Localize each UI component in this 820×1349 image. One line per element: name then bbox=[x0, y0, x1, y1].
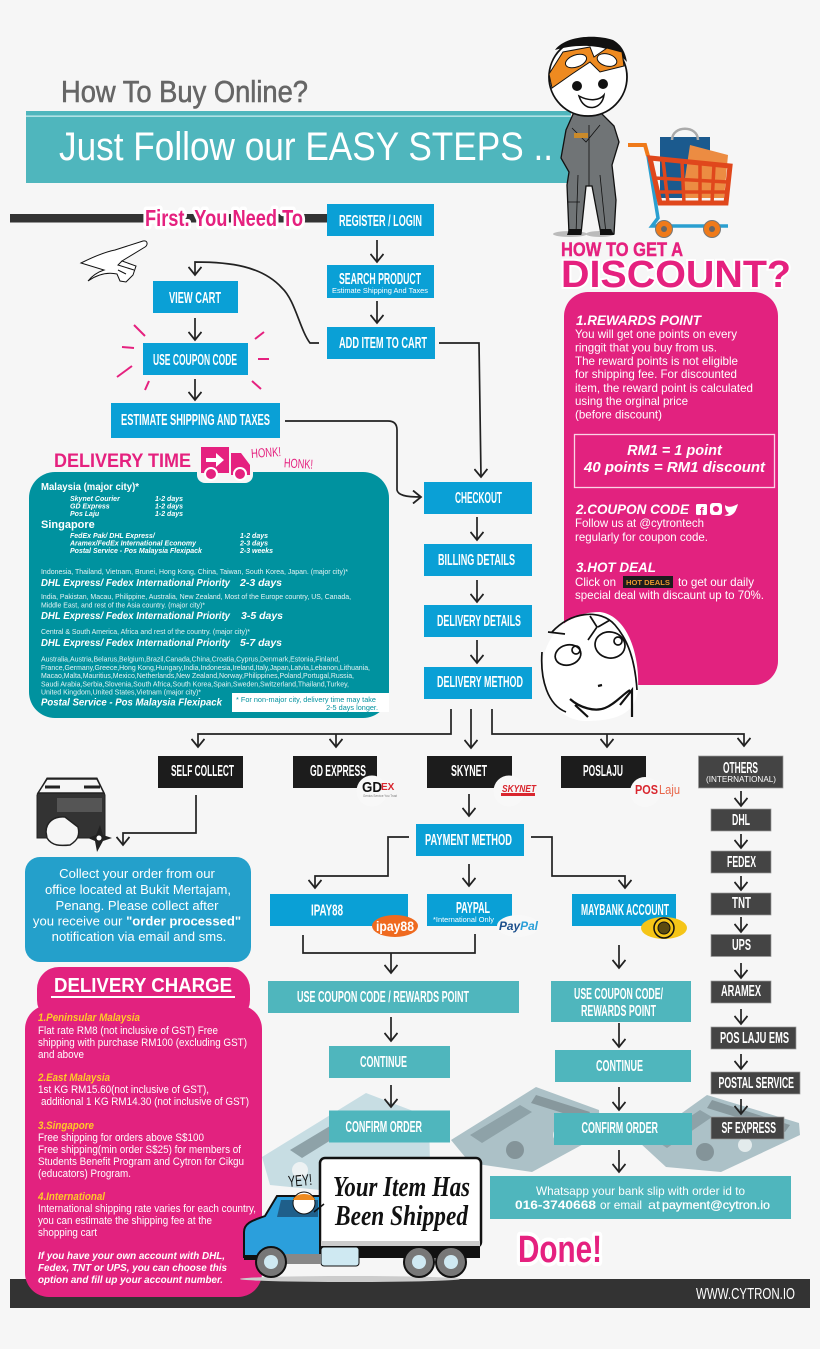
box: confirm order right: CONFIRM ORDER bbox=[582, 1120, 658, 1137]
box: use coupon code rewards right bbox=[551, 981, 691, 1022]
background: faded circuit boards bbox=[262, 1087, 800, 1190]
panel: discount: 40 points = RM1 discount bbox=[583, 460, 766, 476]
column: other couriers: ARAMEX bbox=[721, 983, 761, 1000]
arrow: bracket to coupon bbox=[303, 934, 475, 973]
logo: paypal bbox=[497, 915, 539, 937]
panel: delivery time: Singapore bbox=[41, 519, 95, 531]
panel: discount: using the orginal price bbox=[575, 395, 688, 408]
panel: discount: special deal with discaunt up to 70%. bbox=[575, 589, 764, 602]
box: confirm order left bbox=[329, 1110, 450, 1142]
panel: delivery time: DHL Express/ Fedex International Priority bbox=[41, 610, 231, 622]
panel: delivery time: * For non-major city, delivery time may take bbox=[236, 695, 376, 704]
box: others international bbox=[698, 756, 783, 788]
panel: discount: Click on bbox=[575, 576, 616, 589]
panel: delivery time: 1-2 days bbox=[155, 504, 183, 510]
box: estimate shipping: ESTIMATE SHIPPING AND TAXES bbox=[121, 412, 270, 429]
heading: First You Need To: First. You Need To bbox=[145, 205, 303, 231]
box: use coupon code rewards left: USE COUPON CODE / REWARDS POINT bbox=[297, 989, 469, 1006]
text: honk honk: HONK! bbox=[284, 455, 313, 472]
box: search product: Estimate Shipping And Taxes bbox=[332, 286, 428, 295]
arrow: coupon to continue left bbox=[390, 1017, 392, 1041]
box: search product: SEARCH PRODUCT bbox=[339, 271, 421, 288]
panel: delivery charge: and above bbox=[38, 1049, 84, 1061]
illustration: shipped truck: Your Item Has bbox=[333, 1171, 470, 1203]
arrow: confirm to whatsapp bbox=[618, 1150, 620, 1172]
arrow: register to search bbox=[376, 240, 378, 262]
arrow: continue to confirm left bbox=[390, 1085, 392, 1107]
logo: gdex: EX bbox=[381, 782, 395, 793]
panel: discount bbox=[564, 292, 778, 685]
arrow: self collect to info bbox=[123, 795, 196, 845]
arrow: maybank to coupon bbox=[618, 945, 620, 968]
box: use coupon code bbox=[143, 343, 248, 375]
panel: discount: item, the reward point is calculated bbox=[575, 382, 753, 395]
box: paypal bbox=[427, 894, 512, 926]
box: skynet bbox=[427, 756, 512, 788]
box: self collect: SELF COLLECT bbox=[171, 763, 234, 780]
arrow: view cart to coupon bbox=[194, 318, 196, 340]
box: view cart bbox=[153, 281, 238, 313]
panel: delivery charge bbox=[25, 967, 262, 1297]
box: payment method bbox=[416, 824, 524, 856]
text: honk honk bbox=[251, 444, 313, 472]
panel: delivery charge: 1.Peninsular Malaysia bbox=[38, 1012, 140, 1024]
box: continue right: CONTINUE bbox=[596, 1058, 643, 1075]
panel: delivery charge: additional 1 KG RM14.30 (not inclusive of GST) bbox=[41, 1096, 249, 1108]
panel: delivery time: Central & South America, Africa and rest of the country. (major city)* bbox=[41, 627, 250, 636]
arrow: add item to view cart bbox=[195, 262, 319, 343]
panel: delivery time: Saudi Arabia,Serbia,Slovenia,South Africa,South Korea,Spain,Sweden,Switzerland,Thailand,Turkey, bbox=[41, 680, 349, 688]
panel: delivery charge: Free shipping(min order S$25) for members of bbox=[38, 1144, 241, 1156]
logo: pos laju: POS bbox=[635, 782, 658, 797]
panel: discount: f bbox=[700, 506, 704, 518]
panel: delivery time: 5-7 days bbox=[240, 637, 282, 649]
panel: delivery time: Malaysia (major city)* bbox=[41, 482, 139, 493]
panel: delivery charge: Fedex, TNT or UPS, you can choose this bbox=[38, 1262, 227, 1274]
box: use coupon code rewards left bbox=[268, 981, 519, 1013]
panel: delivery time: France,Germany,Greece,Hong Kong,Hungary,India,Indonesia,Ireland,Italy,Japan,Latvia,Lebanon,Lithuania, bbox=[41, 663, 370, 672]
panel: delivery time: Postal Service - Pos Malaysia Flexipack bbox=[70, 548, 203, 555]
box: gd express bbox=[293, 756, 377, 788]
panel: discount: 2.COUPON CODE bbox=[575, 502, 690, 517]
panel: delivery time: 2-3 days bbox=[239, 577, 282, 589]
logo: gdex: Genius Service You Trust bbox=[363, 794, 397, 798]
arrow: checkout to billing bbox=[476, 517, 478, 540]
panel: collect info: you receive our "order processed" bbox=[33, 914, 241, 928]
column: other couriers: DHL bbox=[732, 812, 750, 829]
arrow: delivery details to method bbox=[476, 640, 478, 663]
arrow: coupon to continue right bbox=[618, 1023, 620, 1047]
box: checkout bbox=[424, 482, 532, 514]
heading: how to get a discount: HOW TO GET A bbox=[561, 240, 683, 261]
box: others international: (INTERNATIONAL) bbox=[706, 774, 776, 784]
panel: discount: to get our daily bbox=[678, 576, 754, 589]
panel: delivery charge: Flat rate RM8 (not inclusive of GST) Free bbox=[38, 1025, 218, 1037]
heading: done: Done! bbox=[518, 1229, 602, 1271]
panel: delivery time: 1-2 days bbox=[155, 496, 183, 503]
illustration: shipped truck bbox=[240, 1158, 481, 1282]
panel: collect info: Collect your order from our bbox=[59, 866, 215, 881]
panel: delivery charge: 3.Singapore bbox=[38, 1120, 94, 1132]
box: checkout: CHECKOUT bbox=[455, 490, 502, 507]
box: delivery method: DELIVERY METHOD bbox=[437, 674, 523, 691]
box: others international: OTHERS bbox=[723, 760, 758, 777]
box: add item to cart: ADD ITEM TO CART bbox=[339, 335, 427, 352]
box: paypal: PAYPAL bbox=[456, 900, 490, 917]
panel: delivery charge: you can estimate the shipping fee at the bbox=[38, 1215, 212, 1227]
decoration: coupon rays bbox=[117, 325, 269, 390]
icon: shopping cart bbox=[628, 129, 730, 238]
box: poslaju bbox=[561, 756, 646, 788]
column: other couriers: SF EXPRESS bbox=[722, 1120, 776, 1137]
text: honk honk: HONK! bbox=[251, 444, 282, 461]
panel: delivery time: Macao,Malta,Mauritius,Mexico,Netherlands,New Zealand,Norway,Philippines,Poland,Portugal,Russia, bbox=[41, 671, 354, 680]
box: maybank account: MAYBANK ACCOUNT bbox=[581, 902, 669, 919]
box: paypal: *International Only bbox=[433, 917, 495, 924]
panel: delivery time: Australia,Austria,Belarus,Belgium,Brazil,Canada,China,Croatia,Cyprus,Denmark,Estonia,Finland, bbox=[41, 654, 340, 664]
title: How To Buy Online: How To Buy Online? bbox=[61, 74, 308, 109]
panel: delivery charge: 4.International bbox=[37, 1191, 106, 1203]
box: gd express: GD EXPRESS bbox=[310, 763, 366, 780]
arrow: estimate to checkout bbox=[285, 421, 421, 497]
panel: delivery charge: 1st KG RM15.60(not inclusive of GST), bbox=[38, 1084, 209, 1096]
panel: delivery time: 1-2 days bbox=[240, 533, 268, 540]
panel: delivery time: Postal Service - Pos Malaysia Flexipack bbox=[41, 696, 223, 708]
box: view cart: VIEW CART bbox=[169, 290, 221, 307]
logo: skynet bbox=[494, 776, 537, 806]
box: poslaju: POSLAJU bbox=[583, 763, 623, 780]
icon: thinking face bbox=[542, 612, 638, 721]
panel: delivery time: 2-3 weeks bbox=[239, 548, 273, 555]
box: add item to cart bbox=[327, 327, 435, 359]
box: whatsapp bank slip: Whatsapp your bank slip with order id to bbox=[536, 1184, 745, 1198]
logo: gdex: GD bbox=[362, 779, 382, 796]
heading: how to get a discount: DISCOUNT? bbox=[561, 254, 791, 296]
panel: delivery time: DHL Express/ Fedex International Priority bbox=[41, 577, 231, 589]
panel: collect info: notification via email and sms. bbox=[52, 929, 226, 944]
box: continue left: CONTINUE bbox=[360, 1054, 407, 1071]
box: register login: REGISTER / LOGIN bbox=[339, 213, 422, 230]
banner: Just Follow our EASY STEPS bbox=[26, 111, 571, 183]
panel: delivery time bbox=[29, 472, 389, 718]
arrow: add item to checkout bbox=[439, 343, 481, 477]
panel: delivery time: Skynet Courier bbox=[70, 496, 121, 503]
arrow: billing to delivery details bbox=[476, 580, 478, 602]
panel: delivery charge: If you have your own account with DHL, bbox=[38, 1250, 225, 1262]
box: whatsapp bank slip: 016-3740668 bbox=[515, 1198, 596, 1212]
heading: delivery time: DELIVERY TIME bbox=[54, 450, 191, 472]
arrow: payment to paypal bbox=[468, 864, 470, 886]
panel: collect info: office located at Bukit Mertajam, bbox=[45, 882, 231, 897]
panel: discount: for shipping fee. For discounted bbox=[575, 368, 737, 381]
panel: discount: (before discount) bbox=[575, 408, 662, 422]
character: pilot mascot bbox=[549, 37, 627, 237]
panel: delivery charge: 2.East Malaysia bbox=[37, 1072, 110, 1084]
logo: paypal: PayPal bbox=[499, 921, 539, 933]
panel: discount: 3.HOT DEAL bbox=[576, 560, 656, 575]
box: use coupon code: USE COUPON CODE bbox=[153, 352, 237, 369]
logo: pos laju: Laju bbox=[659, 782, 680, 797]
panel: discount: Follow us at @cytrontech bbox=[575, 517, 704, 530]
panel: collect info: Penang. Please collect after bbox=[55, 898, 219, 913]
panel: delivery charge: Students Benefit Program and Cytron for Cikgu bbox=[38, 1156, 244, 1168]
box: maybank account bbox=[572, 894, 676, 926]
panel: delivery time: Pos Laju bbox=[70, 511, 100, 518]
logo: skynet: SKYNET bbox=[502, 784, 537, 795]
panel: delivery charge: Free shipping for orders above S$100 bbox=[38, 1132, 204, 1144]
box: self collect bbox=[158, 756, 243, 788]
panel: delivery charge: DELIVERY CHARGE bbox=[54, 975, 232, 997]
panel: delivery charge: (educators) Program. bbox=[38, 1168, 131, 1180]
panel: delivery time: 1-2 days bbox=[155, 511, 183, 518]
arrow: payment to maybank bbox=[531, 837, 625, 888]
box: whatsapp bank slip bbox=[490, 1176, 791, 1219]
arrow: skynet to payment bbox=[468, 794, 470, 816]
box: use coupon code rewards right: USE COUPON CODE/ bbox=[574, 986, 663, 1003]
box: whatsapp bank slip: or email bbox=[600, 1198, 642, 1212]
box: search product bbox=[327, 265, 434, 298]
arrow: payment to ipay88 bbox=[315, 837, 409, 888]
panel: delivery time: 3-5 days bbox=[241, 610, 283, 622]
box: whatsapp bank slip: at bbox=[648, 1198, 661, 1212]
panel: delivery charge: option and fill up your account number. bbox=[38, 1274, 223, 1286]
panel: delivery charge: shipping with purchase RM100 (excluding GST) bbox=[38, 1037, 247, 1049]
arrows: delivery method branches bbox=[198, 709, 744, 748]
panel: discount: HOT DEALS bbox=[626, 578, 670, 587]
box: delivery details bbox=[424, 605, 532, 637]
box: confirm order left: CONFIRM ORDER bbox=[346, 1119, 422, 1136]
panel: delivery time: Aramex/FedEx International Economy bbox=[69, 540, 197, 548]
panel: collect info bbox=[25, 857, 251, 962]
column: other couriers bbox=[711, 791, 800, 1139]
box: billing details bbox=[424, 544, 532, 576]
panel: delivery time: India, Pakistan, Macau, Philippine, Australia, New Zealand, Most of the Europe country, US, Canada, bbox=[41, 592, 351, 601]
logo: ipay88: ipay88 bbox=[376, 918, 414, 934]
panel: delivery charge: International shipping rate varies for each country, bbox=[38, 1203, 256, 1215]
box: payment method: PAYMENT METHOD bbox=[425, 832, 512, 849]
column: other couriers: FEDEX bbox=[727, 854, 756, 871]
panel: delivery time: DHL Express/ Fedex International Priority bbox=[41, 637, 231, 649]
box: continue right bbox=[555, 1050, 691, 1082]
icon: delivery truck bbox=[197, 445, 253, 483]
panel: delivery time: United Kingdom,United States,Vietnam (major city)* bbox=[41, 688, 201, 696]
logo: ipay88 bbox=[372, 915, 418, 937]
panel: delivery time: Indonesia, Thailand, Vietnam, Brunei, Hong Kong, China, Taiwan, South Korea, Japan. (major city)* bbox=[41, 567, 348, 576]
box: register login bbox=[327, 204, 434, 236]
column: other couriers: UPS bbox=[732, 937, 751, 954]
panel: delivery time: 2-5 days longer. bbox=[326, 703, 378, 712]
panel: discount: 1.REWARDS POINT bbox=[576, 313, 703, 328]
arrow: coupon to estimate bbox=[194, 379, 196, 400]
panel: delivery charge: shopping cart bbox=[38, 1227, 97, 1239]
box: confirm order right bbox=[554, 1113, 692, 1145]
panel: discount: regularly for coupon code. bbox=[575, 531, 708, 544]
arrow: search to add bbox=[376, 301, 378, 323]
panel: delivery time: FedEx Pak/ DHL Express/ bbox=[70, 533, 156, 540]
banner: Just Follow our EASY STEPS: Just Follow our EASY STEPS .. bbox=[59, 125, 553, 169]
panel: delivery time: 2-3 days bbox=[239, 540, 268, 548]
box: billing details: BILLING DETAILS bbox=[438, 552, 515, 569]
panel: discount: The reward points is not eligible bbox=[575, 355, 738, 368]
box: continue left bbox=[329, 1046, 450, 1078]
box: delivery details: DELIVERY DETAILS bbox=[437, 613, 521, 630]
panel: delivery time: Middle East, and rest of the Asia country. (major city)* bbox=[41, 600, 205, 610]
bottom bar bbox=[10, 1279, 810, 1308]
box: ipay88 bbox=[270, 894, 408, 926]
illustration: shipped truck: YEY! bbox=[287, 1172, 313, 1191]
divider bar bbox=[10, 214, 327, 222]
icon: pointing hand bbox=[81, 241, 147, 282]
logo: maybank bbox=[641, 917, 687, 939]
logo: pos laju bbox=[630, 777, 680, 807]
box: whatsapp bank slip: payment@cytron.io bbox=[662, 1198, 770, 1212]
box: delivery method bbox=[424, 667, 532, 699]
box: skynet: SKYNET bbox=[451, 763, 487, 780]
logo: gdex bbox=[356, 776, 397, 806]
panel: discount: RM1 = 1 point bbox=[627, 443, 723, 459]
icon: box hand-off bbox=[37, 778, 112, 852]
panel: discount: ringgit that you buy from us. bbox=[575, 342, 717, 354]
box: estimate shipping bbox=[111, 403, 280, 438]
panel: delivery time: GD Express bbox=[70, 504, 110, 510]
panel: discount: You will get one points on every bbox=[575, 328, 737, 341]
box: ipay88: IPAY88 bbox=[311, 902, 343, 920]
arrow: continue to confirm right bbox=[618, 1087, 620, 1110]
box: use coupon code rewards right: REWARDS POINT bbox=[581, 1003, 656, 1020]
column: other couriers: TNT bbox=[732, 895, 751, 912]
illustration: shipped truck: Been Shipped bbox=[334, 1200, 468, 1232]
